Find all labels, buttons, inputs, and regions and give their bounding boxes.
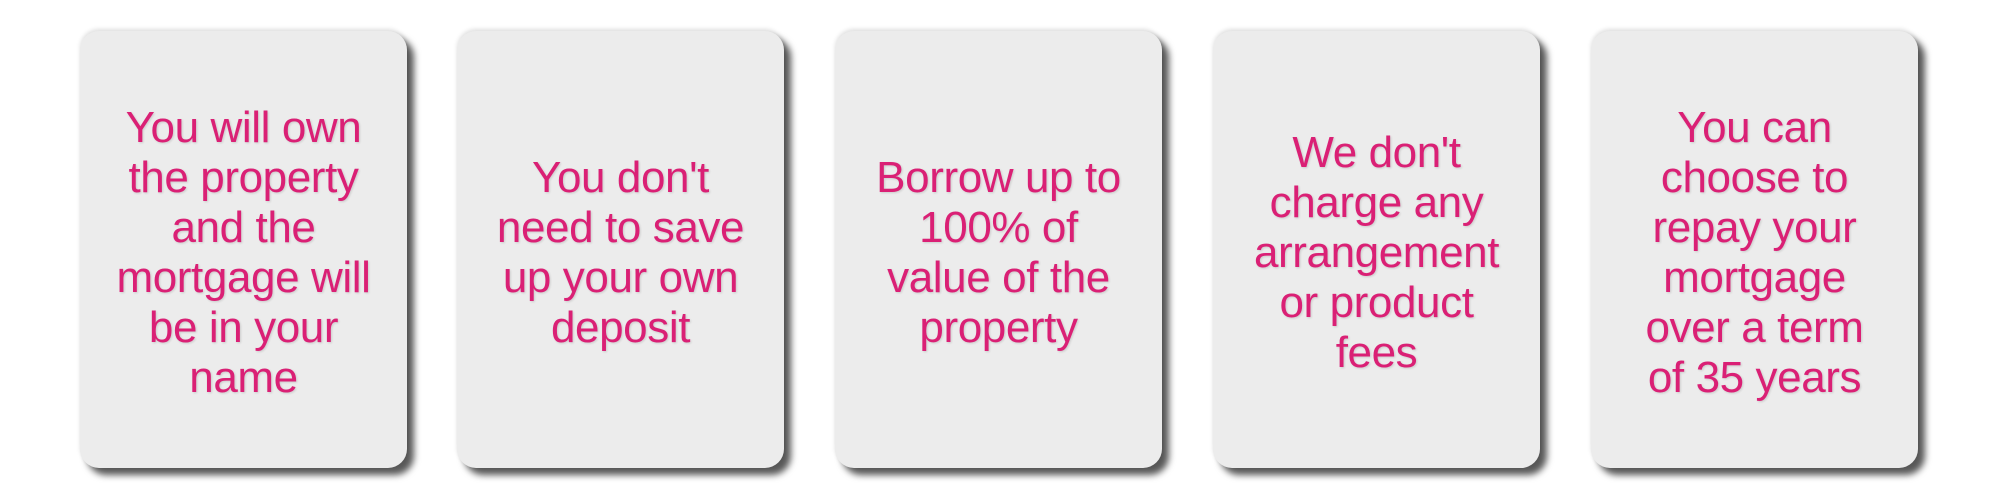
panel: borrow up to 100% xyxy=(835,31,1162,468)
text: no fees: We don't xyxy=(1292,128,1461,176)
text: no fees xyxy=(1254,128,1500,376)
text: no deposit xyxy=(497,152,744,352)
text: 35 year term: of 35 years xyxy=(1648,352,1861,402)
text: 35 year term: You can xyxy=(1677,102,1832,152)
text: 35 year term: repay your xyxy=(1653,202,1856,252)
text: no fees: fees xyxy=(1336,328,1417,376)
panel: no fees xyxy=(1213,31,1540,468)
text: 35 year term: choose to xyxy=(1661,152,1848,202)
text: borrow up to 100%: property xyxy=(919,302,1078,352)
text: no deposit: up your own xyxy=(503,252,738,302)
text: no deposit: need to save xyxy=(497,202,744,252)
text: borrow up to 100%: Borrow up to xyxy=(876,152,1121,202)
panel: own the property xyxy=(80,31,407,468)
text: no fees: arrangement xyxy=(1254,228,1499,276)
text: 35 year term: over a term xyxy=(1645,302,1864,352)
text: no deposit: deposit xyxy=(551,302,690,352)
text: borrow up to 100%: 100% of xyxy=(919,202,1078,252)
panel: 35 year term xyxy=(1591,31,1918,468)
text: no deposit: You don't xyxy=(532,152,709,202)
text: own the property xyxy=(116,102,370,402)
text: own the property: the property xyxy=(128,152,358,202)
text: 35 year term: mortgage xyxy=(1663,252,1846,302)
text: own the property: name xyxy=(189,352,298,402)
text: borrow up to 100% xyxy=(876,152,1121,352)
text: own the property: You will own xyxy=(126,102,361,152)
text: own the property: be in your xyxy=(149,302,338,352)
text: own the property: mortgage will xyxy=(116,252,370,302)
text: no fees: charge any xyxy=(1270,178,1483,226)
panel: no deposit xyxy=(457,31,784,468)
text: borrow up to 100%: value of the xyxy=(887,252,1110,302)
text: own the property: and the xyxy=(171,202,316,252)
text: 35 year term xyxy=(1645,102,1864,402)
text: no fees: or product xyxy=(1279,278,1474,326)
